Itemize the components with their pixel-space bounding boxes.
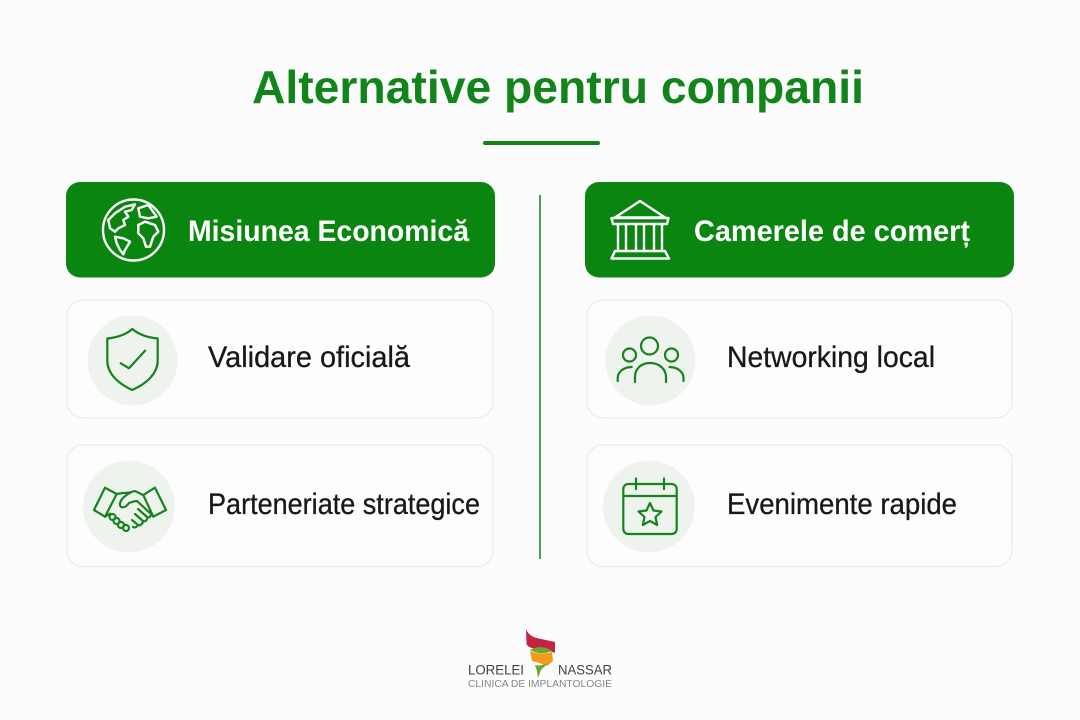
panel: Misiunea Economica header — [66, 182, 495, 278]
icon: globe — [103, 200, 164, 260]
icon: calendar star — [623, 478, 677, 534]
title underline — [483, 141, 600, 145]
icon: handshake — [94, 488, 166, 531]
icon: institution building — [612, 201, 669, 258]
logo ribbon mark — [526, 629, 555, 678]
label: Evenimente rapide — [727, 488, 957, 521]
logo name: LORELEI — [468, 662, 524, 678]
label: Parteneriate strategice — [208, 488, 480, 521]
card: Evenimente rapide — [587, 445, 1012, 566]
header text: Misiunea Economică — [188, 215, 469, 248]
label: Networking local — [727, 341, 935, 374]
card: Validare oficiala — [67, 300, 493, 418]
card: Networking local — [587, 300, 1012, 418]
logo tagline: CLINICA DE IMPLANTOLOGIE — [468, 678, 612, 690]
icon: people group — [618, 338, 684, 382]
icon: shield check — [107, 329, 158, 390]
center divider — [539, 195, 541, 559]
title: Alternative pentru companii — [252, 61, 864, 113]
label: Validare oficială — [208, 341, 411, 374]
logo: NASSAR — [558, 662, 612, 678]
card: Parteneriate strategice — [67, 445, 493, 566]
panel: Camerele de comert header — [585, 182, 1014, 278]
logo — [468, 629, 612, 690]
header text: Camerele de comerț — [694, 215, 970, 248]
